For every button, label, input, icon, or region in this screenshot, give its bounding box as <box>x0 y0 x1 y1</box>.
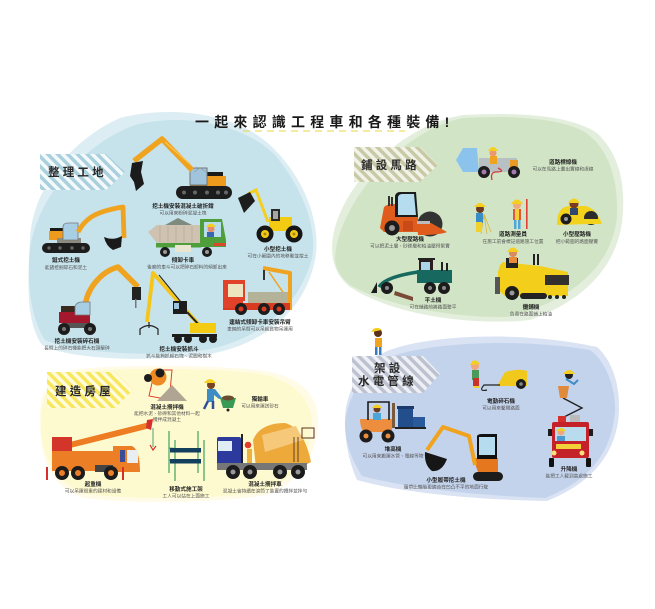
caption: aerial lift: 升降機 <box>561 465 578 473</box>
excavator with rock breaker <box>58 267 141 335</box>
caption: articulated truck <box>227 318 293 332</box>
caption: electric breaker <box>482 397 520 412</box>
caption: mixer truck: 混凝土攪拌車 <box>248 480 282 488</box>
caption: road marking machine <box>533 158 594 172</box>
caption: mini excavator: 小型履帶挖土機 <box>426 476 466 484</box>
caption: scaffold <box>163 485 210 500</box>
asphalt paver <box>495 248 569 300</box>
caption: crusher excavator <box>152 202 214 216</box>
caption: dump truck: 後廂的車斗可以把碎石卸料的傾卸出來 <box>147 264 227 270</box>
caption: wheelbarrow: 獨輪車 <box>252 395 269 403</box>
caption: grapple: 抓斗能夠抓起石塊、泥圖和樹木 <box>146 352 212 360</box>
road marking machine <box>456 147 520 180</box>
caption: road marking machine: 可以在馬路上畫出實線和虛線 <box>533 166 594 172</box>
forklift <box>360 402 426 442</box>
caption: forklift <box>363 445 424 460</box>
section heading: paving roads <box>354 147 438 182</box>
caption: crusher excavator: 挖土機安裝混凝土破折鉗 <box>152 202 214 210</box>
section heading: water and electric lines: 架設 <box>374 361 403 375</box>
title: 一起來認識工程車和各種裝備! <box>195 114 454 130</box>
caption: articulated truck: 連結式傾卸卡車安裝吊臂 <box>229 318 291 326</box>
caption: rock breaker: 長臂上的碎石機能把大石頭擊碎 <box>44 344 110 352</box>
caption: small roller: 把小範圍的路面壓實 <box>556 238 598 245</box>
caption: dump truck: 傾卸卡車 <box>172 256 195 264</box>
caption: mini excavator: 履帶比輪胎更適合在凹凸不平的地面行駛 <box>404 484 488 490</box>
caption: crawler excavator: 鏈式挖土機 <box>52 256 80 264</box>
concrete mixer truck <box>217 423 314 479</box>
caption: electric breaker: 電動碎石機 <box>487 397 515 405</box>
section heading: paving roads: 鋪設馬路 <box>361 158 420 172</box>
mini excavator <box>425 427 503 481</box>
caption: concrete mixer: 混凝土攪拌機 <box>150 403 184 411</box>
caption: crane: 起重機 <box>85 480 102 488</box>
caption: small roller: 小型壓路機 <box>563 230 591 238</box>
caption: articulated truck: 車輛的吊臂可以吊起貨物吊運用 <box>227 326 293 332</box>
articulated truck with crane <box>223 268 290 315</box>
caption: concrete mixer: 攪拌成混凝土 <box>153 416 181 423</box>
concrete mixer <box>144 368 187 401</box>
caption: crusher excavator: 可以用來粉碎混凝土塊 <box>160 210 207 216</box>
caption: large road roller: 大型壓路機 <box>396 235 424 243</box>
caption: paver <box>510 303 552 318</box>
caption: small roller <box>556 230 598 245</box>
caption: surveyors <box>483 230 544 245</box>
caption: large road roller <box>370 235 450 250</box>
caption: mixer truck <box>223 480 307 494</box>
caption: paver: 負責在路面鋪上柏油 <box>510 310 552 318</box>
caption: paver: 攤鋪機 <box>523 303 540 311</box>
caption: grapple <box>146 345 212 360</box>
caption: rock breaker: 挖土機安裝碎石機 <box>55 337 100 345</box>
caption: mini excavator <box>404 476 488 490</box>
section heading: clearing the site <box>40 154 125 190</box>
caption: dump truck <box>147 256 227 270</box>
caption: mini loader <box>248 245 309 260</box>
motor grader <box>371 258 452 301</box>
caption: crawler excavator: 能鏟挖掘碎石和泥土 <box>45 264 87 271</box>
material handler with grapple <box>140 273 217 343</box>
panel: building houses <box>40 366 318 502</box>
electric rock breaker <box>470 360 527 390</box>
caption: aerial lift: 能把工人載到高處施工 <box>546 472 593 480</box>
caption: wheelbarrow <box>241 395 279 410</box>
section heading: building houses: 建造房屋 <box>55 384 114 398</box>
section heading: building houses <box>47 372 133 408</box>
caption: grader: 平土機 <box>425 296 442 304</box>
worker on top of heading <box>371 328 382 355</box>
caption: grapple: 挖土機安裝抓斗 <box>159 345 199 353</box>
caption: concrete mixer: 能把水泥、砂礫和其他材料一起 <box>134 410 200 417</box>
caption: scaffold: 工人可以站在上面施工 <box>163 492 210 500</box>
caption: grader: 可在鋪路前將路面整平 <box>410 304 457 310</box>
section heading: water and electric lines: 水電管線 <box>358 374 417 388</box>
mini loader excavator <box>238 190 302 242</box>
caption: large road roller: 可以把泥土層、砂礫層和柏油壓得緊實 <box>370 242 450 250</box>
caption: mixer truck: 混凝土會持續在滾筒了裝置的攪拌並拌勻 <box>223 488 307 494</box>
dump truck <box>148 218 226 257</box>
worker with wheelbarrow <box>204 379 236 412</box>
aerial lift truck <box>548 370 593 467</box>
panel: clearing the site <box>28 112 317 360</box>
panel: paving roads <box>332 114 623 322</box>
caption: concrete mixer <box>134 403 200 423</box>
excavator with concrete crusher <box>130 139 232 199</box>
caption: surveyors: 在施工前會標記道路施工位置 <box>483 238 544 245</box>
caption: forklift: 可以用來搬運水管、電線等物 <box>363 452 424 460</box>
caption: crane <box>65 480 121 494</box>
caption: wheelbarrow: 可以用來運送砂石 <box>241 402 279 410</box>
caption: rock breaker <box>44 337 110 352</box>
small road roller <box>557 198 602 225</box>
caption: surveyors: 道路測量員 <box>499 230 527 238</box>
caption: grader <box>410 296 457 310</box>
large road roller <box>380 192 447 236</box>
panel: water and electric lines <box>345 328 619 501</box>
mobile crane <box>47 419 156 480</box>
caption: scaffold: 移動式施工架 <box>169 485 203 493</box>
caption: mini loader: 可在小範圍內的地移動並挖土 <box>248 252 309 260</box>
crawler excavator <box>42 207 124 253</box>
road surveyors <box>474 199 528 234</box>
caption: road marking machine: 道路標線機 <box>549 158 577 166</box>
caption: crane: 可以吊運很重的建材和設備 <box>65 488 121 494</box>
section heading: clearing the site: 整理工地 <box>48 165 107 179</box>
caption: mini loader: 小型挖土機 <box>264 245 292 253</box>
caption: aerial lift <box>546 465 593 480</box>
caption: forklift: 堆高機 <box>385 445 402 453</box>
section heading: water and electric lines <box>352 356 440 393</box>
caption: electric breaker: 可以用來鑿開路面 <box>482 404 520 412</box>
caption: crawler excavator <box>45 256 87 271</box>
mobile scaffold <box>169 431 204 481</box>
